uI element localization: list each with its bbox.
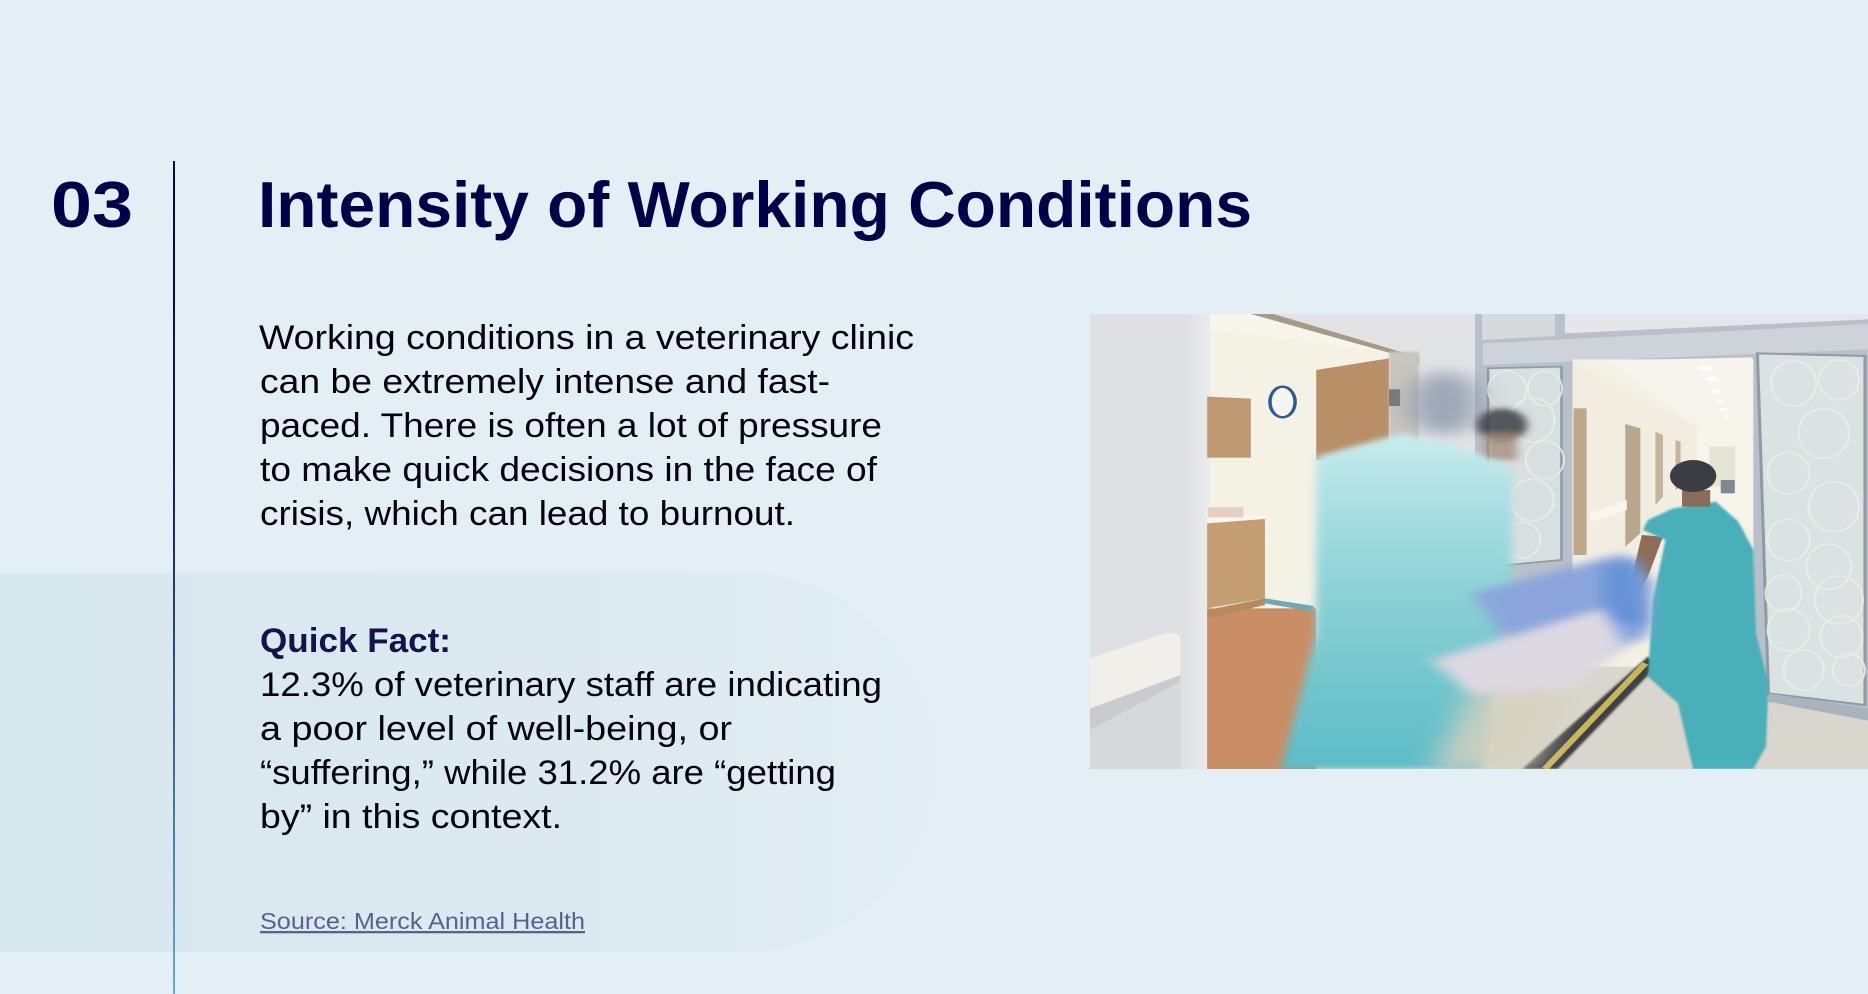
quick fact text: 12.3% of veterinary staff are indicating [260,666,882,704]
wall above doorway [1274,314,1420,437]
body paragraph: can be extremely intense and fast- [260,363,830,401]
left wall with door frame [1090,633,1180,769]
quick fact text: “suffering,” while 31.2% are “getting [260,754,836,792]
yellow stretcher rail [1522,657,1658,769]
source link: Source: Merck Animal Health [260,908,585,934]
automatic door frame [1475,314,1868,721]
blurred ghost head [1409,372,1480,435]
blurred stretcher with blue sheet [1432,553,1653,769]
quick fact text: by” in this context. [260,798,562,836]
quick fact text: a poor level of well-being, or [260,710,732,748]
body paragraph: to make quick decisions in the face of [260,451,878,489]
body paragraph: crisis, which can lead to burnout. [260,495,795,533]
front nurse head [1477,408,1527,460]
treatment room [1207,314,1396,769]
body paragraph: paced. There is often a lot of pressure [260,407,882,445]
quick fact heading: Quick Fact: [260,622,451,660]
corridor floor [1482,667,1868,769]
quick fact text [260,666,882,836]
body paragraph [259,319,914,533]
title: Intensity of Working Conditions [258,168,1252,241]
body paragraph: Working conditions in a veterinary clinic [259,319,914,357]
rear nurse [1628,460,1768,769]
tinted rounded band behind quick fact [0,573,934,952]
corridor [1572,357,1753,693]
section number: 03 [51,168,133,241]
quick fact block [260,622,882,836]
photo: hospital staff rushing a stretcher down a corridor [1090,314,1868,769]
vertical rule [173,161,175,994]
front nurse blurred scrubs [1281,433,1512,769]
frosted glass door panels [1488,353,1865,705]
